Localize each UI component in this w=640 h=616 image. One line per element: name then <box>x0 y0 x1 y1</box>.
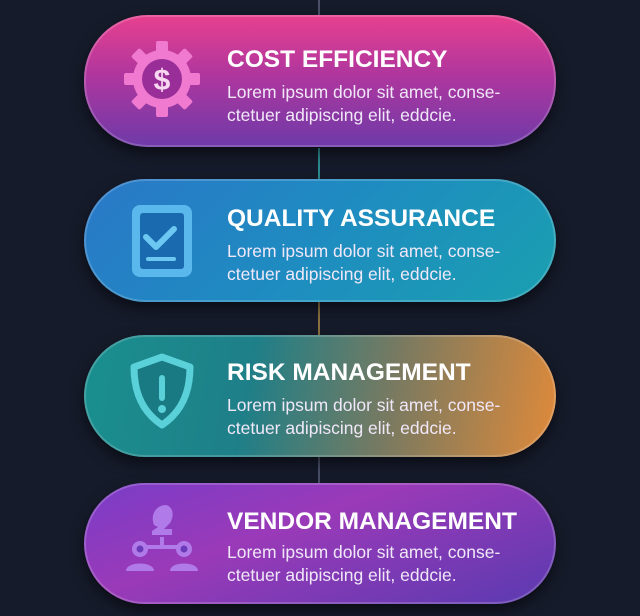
text: quality assurance: Lorem ipsum dolor sit amet, conse- <box>227 241 500 261</box>
text: vendor management <box>227 542 500 584</box>
icon: gear dollar <box>124 41 200 117</box>
icon: gear dollar: $ <box>154 64 171 97</box>
icon: shield <box>130 354 194 428</box>
panel: risk management <box>84 335 556 457</box>
text: vendor management: ctetuer adipiscing elit, eddcie. <box>227 564 457 584</box>
icon: chess knight network <box>126 505 198 571</box>
text: risk management <box>227 395 500 438</box>
text: cost efficiency: Lorem ipsum dolor sit amet, conse- <box>227 82 500 102</box>
text: risk management: ctetuer adipiscing elit, eddcie. <box>227 418 457 438</box>
text: vendor management: Lorem ipsum dolor sit amet, conse- <box>227 542 500 562</box>
title: risk management: RISK MANAGEMENT <box>227 359 471 386</box>
panel: quality assurance <box>84 179 556 302</box>
title: quality assurance: QUALITY ASSURANCE <box>227 205 495 232</box>
title: vendor management: VENDOR MANAGEMENT <box>227 508 517 535</box>
icon: checklist <box>132 205 192 277</box>
text: cost efficiency: ctetuer adipiscing elit, eddcie. <box>227 104 457 124</box>
text: quality assurance: ctetuer adipiscing elit, eddcie. <box>227 264 457 284</box>
title: cost efficiency: COST EFFICIENCY <box>227 46 448 73</box>
text: risk management: Lorem ipsum dolor sit amet, conse- <box>227 395 500 415</box>
panel: cost efficiency <box>84 15 556 147</box>
text: quality assurance <box>227 241 500 284</box>
text: cost efficiency <box>227 82 500 124</box>
panel: vendor management <box>84 483 556 604</box>
